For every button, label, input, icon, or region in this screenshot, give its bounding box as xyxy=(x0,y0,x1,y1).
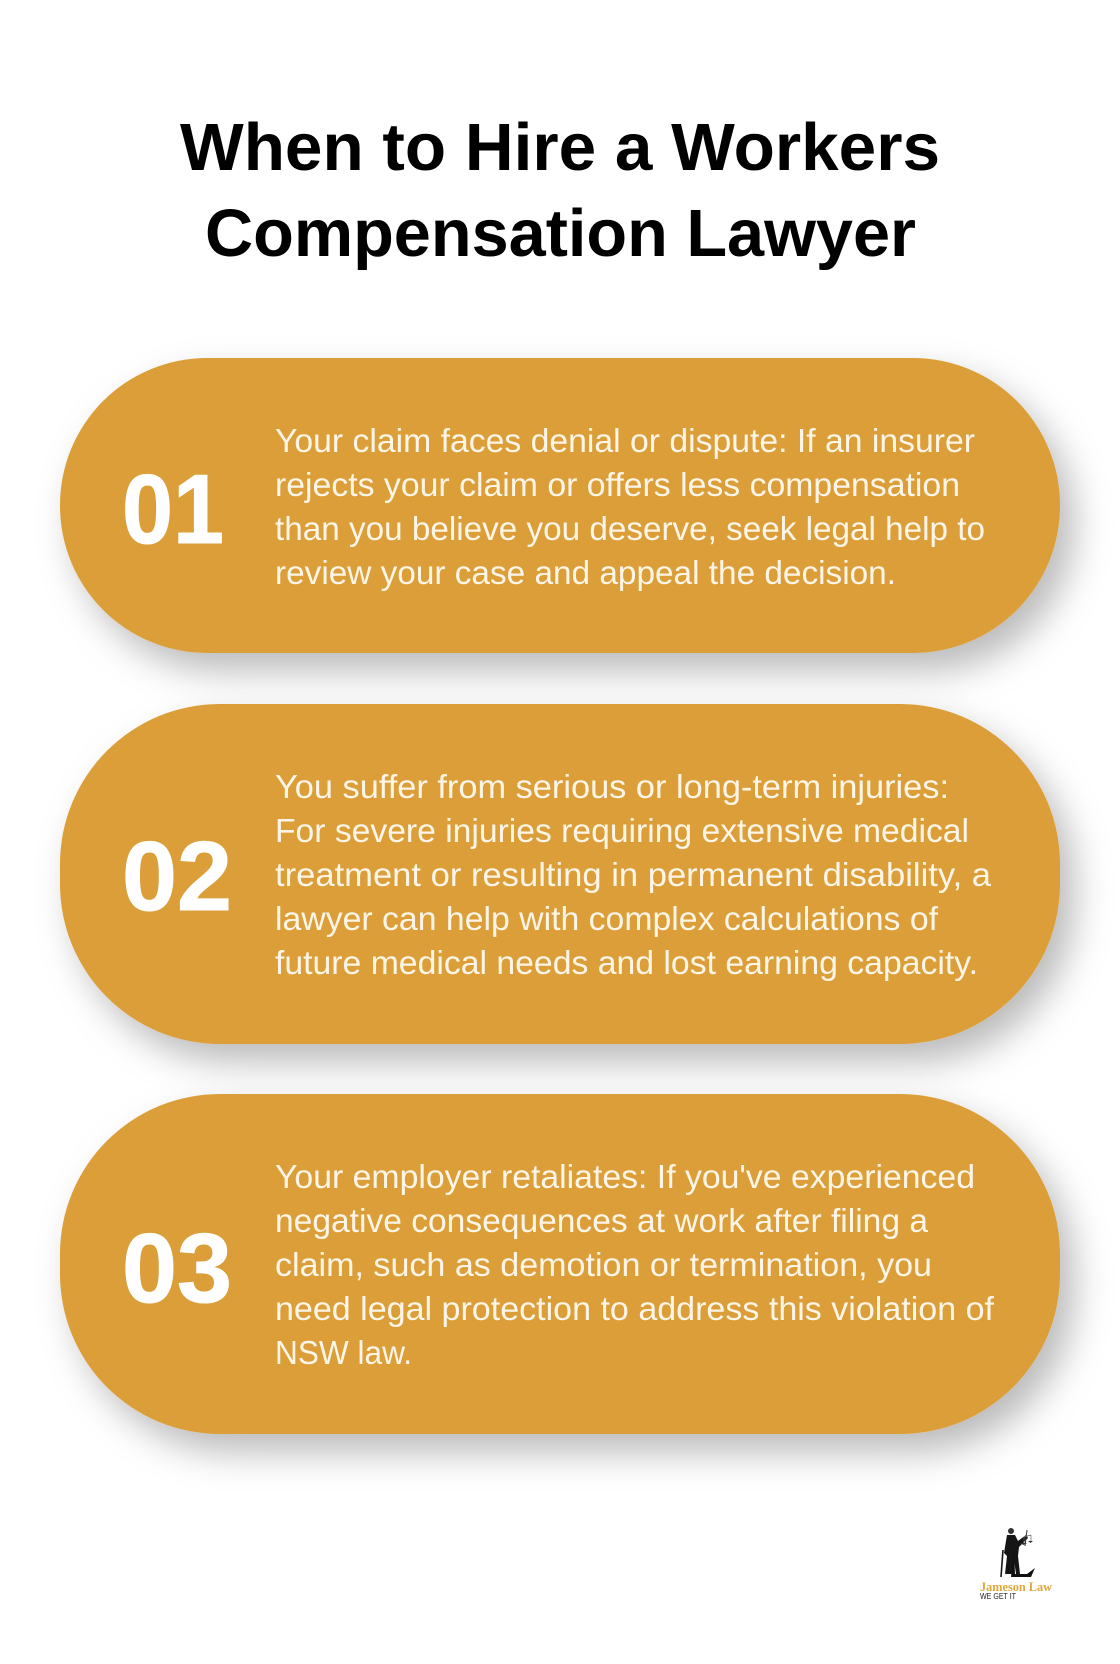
title xyxy=(180,110,940,271)
panel: step 02 xyxy=(60,704,1060,1044)
number 02: 02 xyxy=(122,821,232,931)
icon: lady justice figure with L xyxy=(1001,1528,1035,1577)
text block 03: need legal protection to address this violation of xyxy=(275,1290,995,1327)
text block 03: Your employer retaliates: If you've experienced xyxy=(275,1158,975,1195)
pill background 03 xyxy=(60,1094,1060,1434)
text block 02: lawyer can help with complex calculations of xyxy=(275,900,939,937)
logo: Jameson Law xyxy=(980,1528,1052,1601)
text block 02: treatment or resulting in permanent disability, a xyxy=(275,856,992,893)
title: When to Hire a Workers xyxy=(180,110,940,185)
text block 01: review your case and appeal the decision. xyxy=(275,554,896,591)
text block 02: For severe injuries requiring extensive medical xyxy=(275,812,969,849)
logo tagline: WE GET IT xyxy=(980,1592,1016,1601)
title: Compensation Lawyer xyxy=(205,196,916,271)
text block 02: future medical needs and lost earning capacity. xyxy=(275,944,978,981)
number 03: 03 xyxy=(122,1213,232,1323)
text block 01: than you believe you deserve, seek legal help to xyxy=(275,510,985,547)
text block 02: You suffer from serious or long-term injuries: xyxy=(275,768,949,805)
number 01: 01 xyxy=(122,454,224,564)
text block 01: Your claim faces denial or dispute: If an insurer xyxy=(275,422,975,459)
text block 01: rejects your claim or offers less compensation xyxy=(275,466,960,503)
text block 03: NSW law. xyxy=(275,1334,412,1371)
text block 03: negative consequences at work after filing a xyxy=(275,1202,929,1239)
pill background 01 xyxy=(60,358,1060,653)
text block 03: claim, such as demotion or termination, you xyxy=(275,1246,932,1283)
text block 01 xyxy=(275,422,985,591)
text block 03 xyxy=(275,1158,995,1371)
panel: step 03 xyxy=(60,1094,1060,1434)
logo wordmark: Jameson Law xyxy=(980,1580,1052,1594)
pill background 02 xyxy=(60,704,1060,1044)
panel: step 01 xyxy=(60,358,1060,653)
text block 02 xyxy=(275,768,992,981)
